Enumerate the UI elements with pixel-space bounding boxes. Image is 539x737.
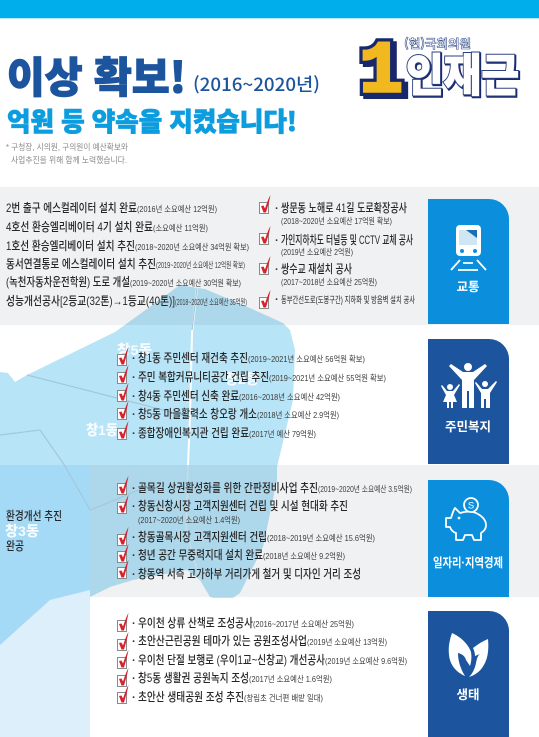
header logo: 1 인재근 <box>360 31 520 116</box>
welfare list: · <box>132 353 136 365</box>
transport list left: (소요예산 11억원) <box>153 223 208 233</box>
economy list: 창동신창시장 고객지원센터 건립 및 시설 현대화 추진 <box>138 498 348 513</box>
transport list right: 동부간선도로(도봉구간) 지하화 및 방음벽 설치 공사 <box>281 294 415 305</box>
transport list left: 2번 출구 에스컬레이터 설치 완료 <box>6 201 137 215</box>
logo caption: (현)국회의원 <box>404 35 471 52</box>
transport list right: · <box>275 203 279 215</box>
ecology list: 창5동 생활권 공원녹지 조성 <box>138 671 249 685</box>
label: welfare: 주민복지 <box>445 420 491 434</box>
title period: (2016~2020년) <box>193 71 320 97</box>
welfare list: 주민 복합커뮤니티공간 건립 추진 <box>138 369 269 384</box>
background bands <box>0 187 539 597</box>
transport list left: 1호선 환승엘리베이터 설치 추진 <box>6 239 135 253</box>
ecology list: 우이천 단절 보행로 (우이1교~신창교) 개선공사 <box>138 652 325 667</box>
transport list left: (2018~2020년 소요예산 35억원) <box>175 297 247 307</box>
map label Chang 1-dong: 창1동 <box>86 422 118 438</box>
economy list: · <box>132 532 136 544</box>
transport list left: (2016년 소요예산 12억원) <box>137 204 217 214</box>
transport list right: (2018~2020년 소요예산 17억원 확보) <box>281 216 392 226</box>
welfare list <box>118 347 386 440</box>
logo numeral 1: 1 <box>363 34 406 116</box>
transport list right: (2017~2018년 소요예산 25억원) <box>281 277 377 287</box>
welfare list: · <box>132 372 136 384</box>
transport list left: (2019~2020년 소요예산 12억원 확보) <box>156 260 245 270</box>
transport list right: 쌍문동 노해로 41길 도로확장공사 <box>281 201 407 215</box>
sidebar note: 완공 <box>6 539 24 553</box>
transport list right: · <box>275 264 279 276</box>
ecology list: (창림초 건너편 배밭 일대) <box>244 693 323 703</box>
ecology list: 우이천 상류 산책로 조성공사 <box>138 615 253 630</box>
welfare list: · <box>132 428 136 440</box>
transport list right: · <box>275 294 279 306</box>
welfare list: (2019~2021년 소요예산 55억원 확보) <box>269 373 386 383</box>
transport list left: 동서연결통로 에스컬레이터 설치 추진 <box>6 257 156 271</box>
ecology list: · <box>132 618 136 630</box>
economy list: 청년 공간 무중력지대 설치 완료 <box>138 548 263 562</box>
sidebar note: 환경개선 추진 <box>6 509 62 523</box>
ecology list: · <box>132 636 136 648</box>
tab: transport <box>428 199 509 324</box>
sidebar note: 창3동 <box>5 523 39 539</box>
economy list: (2019~2020년 소요예산 3.5억원) <box>318 484 412 494</box>
economy list: 골목길 상권활성화를 위한 간판정비사업 추진 <box>138 481 318 495</box>
sidebar note <box>5 509 62 553</box>
ecology list: (2017년 소요예산 1.6억원) <box>249 674 332 684</box>
logo name: 인재근 <box>406 39 519 104</box>
panel: jobs and local economy <box>5 476 509 597</box>
tab: welfare <box>428 339 509 464</box>
transport list right: (2019년 소요예산 2억원) <box>281 247 353 257</box>
transport list left: (녹천자동차운전학원) 도로 개설 <box>6 274 130 289</box>
icon: family <box>441 363 497 408</box>
map label Chang 5-dong: 창5동 <box>117 342 152 358</box>
welfare list: 창1동 주민센터 재건축 추진 <box>138 350 248 365</box>
tab: ecology <box>428 611 509 737</box>
footnote <box>6 142 128 165</box>
transport list left <box>6 201 249 308</box>
logo numeral 1: 1 <box>360 31 403 113</box>
transport list left: 성능개선공사[2등교(32톤)→1등교(40톤)] <box>6 294 175 308</box>
ecology list: · <box>132 655 136 667</box>
white overlay for ecology panel <box>90 598 539 737</box>
economy list: · <box>132 483 136 495</box>
transport list left: 4호선 환승엘리베이터 4기 설치 완료 <box>6 220 153 234</box>
welfare list: (2017년 예산 79억원) <box>249 429 316 439</box>
ecology list: (2019년 소요예산 13억원) <box>307 637 387 647</box>
ecology list <box>118 613 407 704</box>
welfare list: (2019~2021년 소요예산 56억원 확보) <box>248 354 365 364</box>
welfare list: (2018년 소요예산 2.9억원) <box>257 410 339 420</box>
title: 이상 확보! <box>7 44 186 106</box>
ecology list: 초안산근린공원 테마가 있는 공원조성사업 <box>138 634 307 648</box>
transport list left: (2018~2020년 소요예산 34억원 확보) <box>135 242 249 252</box>
logo name: 인재근 <box>406 39 519 104</box>
economy list: · <box>132 501 136 513</box>
welfare list: · <box>132 391 136 403</box>
logo numeral 1: 1 <box>360 31 403 113</box>
panel: ecology <box>118 611 509 737</box>
economy list: 창동역 서측 고가하부 거리가게 철거 및 디자인 거리 조성 <box>138 567 361 581</box>
economy list: · <box>132 550 136 562</box>
panel: transport <box>6 195 509 324</box>
ecology list: · <box>132 673 136 685</box>
economy list: (2018년 소요예산 9.2억원) <box>263 551 345 561</box>
welfare list: 창4동 주민센터 신축 완료 <box>138 389 239 403</box>
map of Dobong area <box>0 285 539 737</box>
tab: economy <box>428 480 509 597</box>
footnote: 사업추진을 위해 함께 노력했습니다. <box>11 155 127 165</box>
logo name: 인재근 <box>407 40 520 105</box>
ecology list: 초안산 생태공원 조성 추진 <box>138 689 244 704</box>
transport list right: 가인지하차도 터널등 및 CCTV 교체 공사 <box>281 233 413 247</box>
panel: resident welfare <box>86 339 509 464</box>
top bar <box>0 0 539 19</box>
label: transport: 교통 <box>456 280 480 294</box>
economy list <box>118 476 412 581</box>
map label Chang 2-dong: 창2동 <box>225 371 259 387</box>
economy list: · <box>132 569 136 581</box>
welfare list: · <box>132 409 136 421</box>
icon: piggy bank: S <box>468 500 474 512</box>
ecology list: (2016~2017년 소요예산 25억원) <box>253 619 354 629</box>
subtitle: 억원 등 약속을 지켰습니다! <box>7 102 297 139</box>
welfare list: 창5동 마을활력소 창오랑 개소 <box>138 407 257 421</box>
welfare list: (2016~2018년 소요예산 42억원) <box>239 392 340 402</box>
ecology list: (2019년 소요예산 9.6억원) <box>325 656 407 666</box>
icon: train <box>451 225 486 270</box>
transport list right <box>260 195 415 308</box>
transport list right: · <box>275 235 279 247</box>
economy list: 창동골목시장 고객지원센터 건립 <box>138 530 267 544</box>
transport list left: (2019~2020년 소요예산 30억원 확보) <box>130 278 241 288</box>
label: ecology: 생태 <box>456 687 480 702</box>
economy list: (2018~2019년 소요예산 15.6억원) <box>267 533 375 543</box>
welfare list: 종합장애인복지관 건립 완료 <box>138 425 249 440</box>
economy list: (2017~2020년 소요예산 1.4억원) <box>138 515 240 525</box>
ecology list: · <box>132 692 136 704</box>
icon: leaves <box>449 633 488 677</box>
label: economy: 일자리·지역경제 <box>433 555 503 570</box>
footnote: * 구청장, 시의원, 구의원이 예산확보와 <box>6 142 128 152</box>
transport list right: 쌍수교 재설치 공사 <box>281 261 352 276</box>
